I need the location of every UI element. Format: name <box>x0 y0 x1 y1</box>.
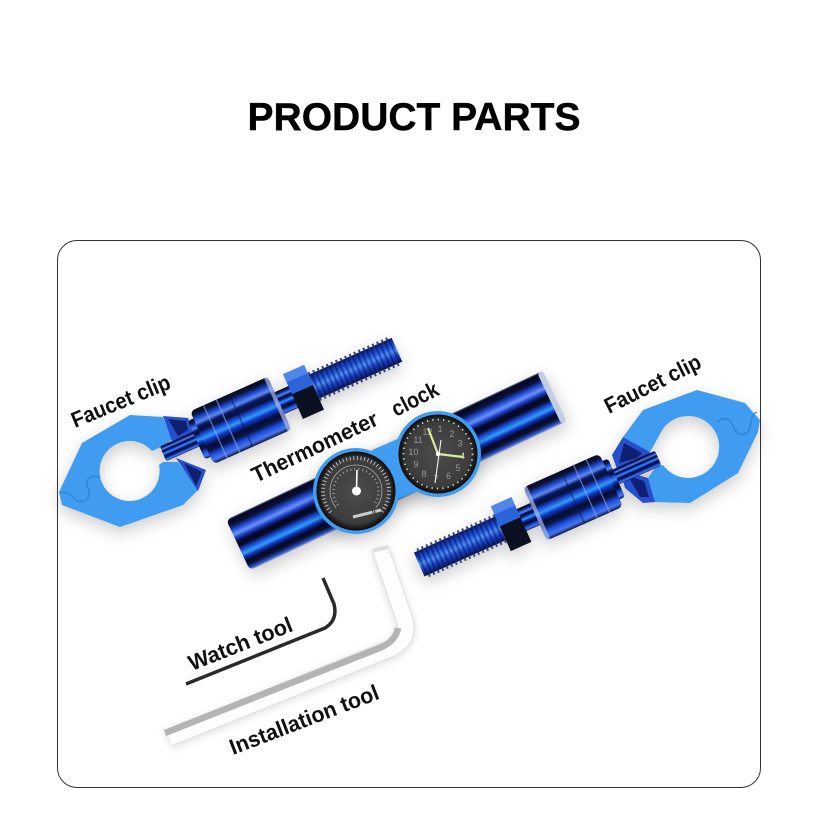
clamp rod <box>641 451 661 472</box>
label: left faucet clip: Faucet clip <box>67 369 174 433</box>
label: clock: clock <box>387 376 443 421</box>
label: watch tool: Watch tool <box>185 612 296 676</box>
title: PRODUCT PARTS <box>248 96 580 139</box>
clip body <box>623 390 760 503</box>
clock dial: 3 <box>457 438 463 448</box>
clock dial: 11 <box>413 435 423 445</box>
watch tool <box>186 578 335 684</box>
clock dial: 7 <box>433 474 439 484</box>
clock dial: 6 <box>446 471 451 481</box>
clock dial <box>398 414 478 494</box>
thermometer and clock assembly <box>226 371 567 570</box>
panel: product parts <box>57 240 761 788</box>
clock dial: 2 <box>449 429 455 439</box>
label: thermometer: Thermometer <box>247 406 382 488</box>
clock dial: 5 <box>455 463 461 473</box>
clock dial: 12 <box>422 427 433 437</box>
cylinder <box>226 371 567 570</box>
clock dial: 8 <box>421 469 427 479</box>
clock dial: 1 <box>437 424 443 434</box>
right faucet clip <box>408 390 760 592</box>
thermometer dial <box>316 452 396 530</box>
gauge housing <box>313 411 481 534</box>
clip body <box>59 415 198 527</box>
white label backing <box>250 375 470 496</box>
clock dial: 9 <box>413 460 419 470</box>
clock dial: 10 <box>408 447 418 457</box>
left faucet clip <box>59 324 409 527</box>
clamp brackets <box>163 416 206 491</box>
bolt and barrel <box>408 437 661 592</box>
clamp brackets <box>612 437 655 503</box>
label: right faucet clip: Faucet clip <box>600 349 705 418</box>
clock dial: 4 <box>460 451 465 461</box>
installation tool <box>165 545 406 738</box>
bolt and barrel <box>152 324 409 481</box>
label: installation tool: Installation tool <box>226 680 382 760</box>
